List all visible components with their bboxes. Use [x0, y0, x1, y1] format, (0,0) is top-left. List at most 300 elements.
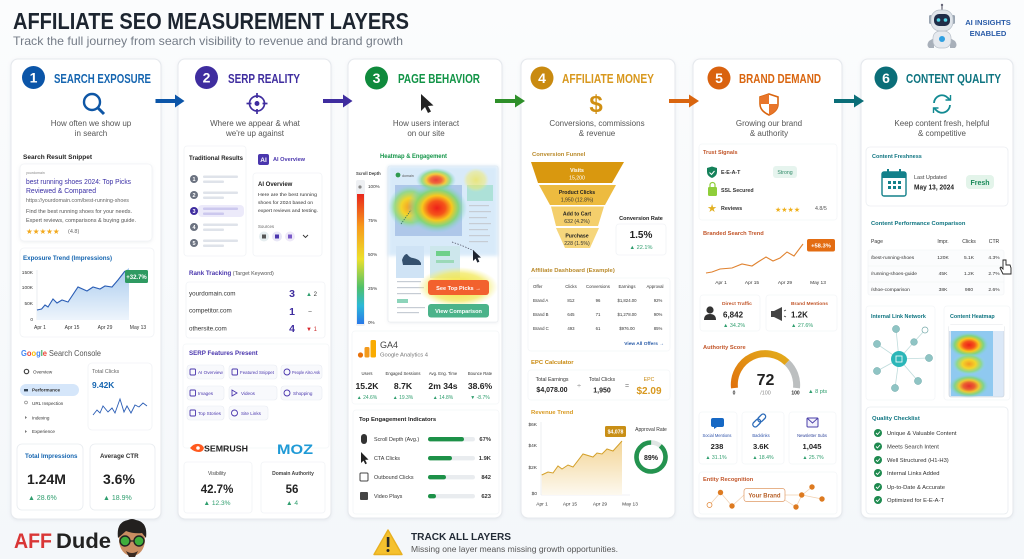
epc calculator: 1,950 — [593, 388, 611, 394]
content performance comparison table: Clicks — [962, 239, 976, 245]
google search console: Overview — [33, 370, 53, 374]
quality checklist: Up-to-Date & Accurate — [887, 485, 945, 491]
line chart: exposure trend: 100K — [22, 285, 34, 291]
ga4 stats: Users — [362, 371, 372, 376]
rank tracking table: ▲ 2 — [306, 292, 318, 298]
content performance comparison table: /shoe-comparison — [871, 287, 910, 293]
stat: visibility: 42.7% — [201, 484, 233, 496]
search result snippet: Expert reviews, comparisons & buying guide. — [26, 218, 136, 224]
content performance comparison table: /best-running-shoes — [871, 255, 915, 261]
top engagement indicators — [353, 410, 499, 514]
google search console — [20, 348, 152, 434]
line chart: branded search trend — [703, 231, 835, 286]
traditional results list: Traditional Results — [189, 156, 244, 162]
button: view comparison: View Comparison — [435, 309, 482, 315]
affiliate dashboard table: Affiliate Dashboard (Example) — [531, 268, 615, 274]
stat: backlinks: ▲ 18.4% — [752, 455, 774, 461]
affiliate dashboard table: 90% — [654, 312, 662, 317]
line chart: branded search trend: Apr 29 — [778, 280, 792, 286]
traditional results list: 5 — [192, 241, 196, 247]
ai overview box: AI Overview — [273, 157, 306, 163]
panel: 6 content quality — [861, 59, 1013, 518]
revenue trend chart — [528, 410, 638, 508]
rank tracking table: 1 — [289, 306, 295, 318]
content performance comparison table: 1.2K — [964, 271, 975, 277]
panel: 4 affiliate money — [521, 59, 675, 518]
stat: newsletter subs: Newsletter Subs — [797, 433, 827, 438]
search result snippet: best running shoes 2024: Top Picks — [26, 179, 131, 186]
affiliate dashboard table: Clicks — [565, 284, 577, 289]
funnel chart: Purchase — [565, 234, 589, 240]
top engagement indicators: Scroll Depth (Avg.) — [374, 437, 419, 443]
stat: domain authority: Domain Authority — [272, 471, 314, 477]
rank tracking table: competitor.com — [189, 308, 232, 314]
revenue trend chart: Apr 29 — [593, 502, 607, 508]
line chart: exposure trend: 0 — [30, 317, 33, 323]
stat: total impressions — [17, 444, 83, 510]
content heatmap — [944, 306, 1010, 400]
heatmap page mockup — [388, 166, 498, 322]
stat: newsletter subs — [789, 412, 836, 464]
funnel chart: 632 (4.2%) — [564, 219, 590, 225]
logo: ga4: Google Analytics 4 — [380, 352, 429, 358]
line chart: branded search trend: May 13 — [810, 280, 826, 286]
rank tracking table: – — [308, 309, 312, 315]
revenue trend chart: $6K — [528, 422, 538, 428]
stat: newsletter subs: 1,045 — [802, 442, 822, 451]
ga4 stats: 38.6% — [468, 381, 493, 391]
affiliate dashboard table: $976.00 — [619, 326, 635, 331]
content freshness — [866, 147, 1008, 206]
quality checklist: Unique & Valuable Content — [887, 431, 957, 437]
badge text: ENABLED — [970, 29, 1007, 38]
revenue trend chart: May 13 — [622, 502, 638, 508]
affiliate dashboard table: $1,278.00 — [617, 312, 637, 317]
stat: total impressions: 1.24M — [27, 471, 66, 487]
heatmap and engagement: Scroll Depth — [356, 171, 381, 176]
badge text — [965, 18, 1011, 38]
search result snippet: Find the best running shoes for your needs. — [26, 209, 132, 215]
line chart: exposure trend: Exposure Trend (Impressions) — [23, 255, 112, 262]
button: view comparison — [428, 304, 489, 318]
affiliate dashboard table: 61 — [596, 326, 601, 331]
stat: brand mentions — [766, 295, 837, 331]
ai overview box: shoes for 2024 based on — [258, 200, 313, 206]
trust signals: Strong — [777, 170, 793, 176]
content performance comparison table: 2.6% — [988, 287, 1000, 293]
stat: social mentions: Social Mentions — [703, 433, 731, 438]
entity recognition: Entity Recognition — [703, 477, 754, 483]
google search console: Total Clicks — [92, 369, 120, 375]
trust signals: ★★★★ — [775, 206, 800, 214]
epc calculator: $2.09 — [636, 386, 662, 397]
affiliate dashboard table: 645 — [567, 312, 575, 317]
heatmap and engagement: Heatmap & Engagement — [380, 154, 447, 160]
description — [51, 119, 132, 138]
donut chart: approval rate — [631, 427, 671, 477]
content performance comparison table: 45K — [939, 271, 948, 277]
serp features present chips: SERP Features Present — [189, 350, 258, 357]
stat: average ctr: ▲ 18.9% — [103, 495, 132, 502]
google search console: Experience — [32, 429, 55, 434]
internal link network diagram: Internal Link Network — [871, 314, 926, 320]
rank tracking table: yourdomain.com — [189, 290, 236, 298]
ai overview box: Here are the best running — [258, 192, 317, 198]
arrow: brand demand to content quality — [834, 94, 864, 108]
trust signals: Reviews — [721, 206, 742, 212]
top engagement indicators: Video Plays — [374, 494, 403, 500]
stat: newsletter subs: ▲ 25.7% — [802, 455, 824, 461]
description: on our site — [407, 129, 445, 138]
rank tracking table: 3 — [289, 288, 295, 300]
stat: total impressions: Total Impressions — [25, 453, 78, 460]
stat: brand mentions: Brand Mentions — [791, 301, 828, 307]
search result snippet: Search Result Snippet — [23, 154, 93, 161]
step number 3: 3 — [373, 70, 381, 86]
funnel chart: Product Clicks — [559, 190, 595, 196]
ga4 stats: ▲ 14.8% — [433, 395, 454, 401]
stat: conversion rate: ▲ 22.1% — [630, 245, 653, 251]
traditional results list: 1 — [192, 177, 196, 183]
line chart: branded search trend: Apr 1 — [715, 280, 727, 286]
serp features present chips: Images — [198, 391, 214, 396]
logo: ga4: GA4 — [380, 340, 398, 350]
affiliate dashboard table: 96 — [596, 298, 601, 303]
stat: average ctr — [90, 444, 155, 510]
affiliate dashboard table: 85% — [654, 326, 662, 331]
step number 6: 6 — [882, 70, 890, 86]
affiliate dashboard table: 493 — [567, 326, 575, 331]
traditional results list: 4 — [192, 225, 196, 231]
stat: domain authority — [261, 462, 325, 513]
line chart: exposure trend: 150K — [22, 270, 34, 276]
description — [210, 119, 301, 138]
content performance comparison table: 980 — [965, 287, 973, 293]
search result snippet: (4.8) — [68, 229, 79, 235]
search result snippet — [20, 154, 152, 241]
icon: target — [246, 93, 268, 114]
affiliate dashboard table: Earnings — [619, 284, 635, 289]
epc calculator: $4,078.00 — [536, 387, 568, 394]
ga4 stats: 15.2K — [356, 381, 379, 391]
epc calculator: Total Earnings — [536, 377, 569, 383]
description — [549, 119, 645, 138]
line chart: exposure trend: May 13 — [130, 325, 146, 331]
badge: AI insights enabled robot — [928, 4, 1011, 48]
line chart: exposure trend: 50K — [24, 301, 34, 307]
top engagement indicators: CTA Clicks — [374, 456, 400, 462]
search result snippet: Reviewed & Compared — [26, 188, 96, 195]
ai overview box — [253, 154, 322, 256]
description: Where we appear & what — [210, 119, 301, 128]
content performance comparison table: Impr. — [937, 239, 949, 245]
icon: dollar sign: $ — [589, 91, 603, 118]
serp features present chips: AI Overview — [198, 370, 223, 375]
stat: average ctr: 3.6% — [103, 471, 135, 487]
quality checklist: Optimized for E-E-A-T — [887, 498, 944, 504]
line chart: branded search trend: Branded Search Trend — [703, 231, 764, 237]
ga4 stats: Bounce Rate — [468, 371, 493, 376]
gauge: authority score: Authority Score — [703, 345, 746, 351]
top engagement indicators: 1.9K — [479, 456, 492, 462]
content performance comparison table: 120K — [937, 255, 949, 261]
ai overview box: Sources — [258, 224, 275, 229]
stat: domain authority: ▲ 4 — [286, 500, 298, 507]
description: Keep content fresh, helpful — [894, 119, 990, 128]
serp features present chips: Videos — [241, 391, 256, 396]
content performance comparison table: 38K — [939, 287, 948, 293]
content freshness: Last Updated — [914, 175, 947, 181]
epc calculator: = — [625, 383, 629, 390]
revenue trend chart: Revenue Trend — [531, 410, 574, 416]
stat: direct traffic: 6,842 — [723, 310, 744, 320]
search result snippet: https://yourdomain.com/best-running-shoes — [26, 198, 130, 204]
step number 1: 1 — [30, 70, 38, 86]
search result snippet: yourdomain — [26, 171, 45, 175]
ga4 stats: Engaged Sessions — [386, 371, 420, 376]
step number 4: 4 — [538, 70, 546, 86]
affiliate dashboard table: 92% — [654, 298, 662, 303]
ga4 stats: ▼ -8.7% — [470, 395, 490, 401]
content performance comparison table: 2.7% — [988, 271, 1000, 277]
heading: content quality: CONTENT QUALITY — [906, 72, 1002, 86]
revenue trend chart: Apr 15 — [563, 502, 577, 508]
heatmap and engagement: 75% — [368, 218, 377, 223]
content freshness: May 13, 2024 — [914, 184, 954, 192]
description: & revenue — [579, 129, 616, 138]
line chart: exposure trend: Apr 1 — [34, 325, 46, 331]
quality checklist: Internal Links Added — [887, 471, 940, 477]
description: & authority — [750, 129, 788, 138]
description: How users interact — [393, 119, 460, 128]
affiliate dashboard table: View All Offers → — [624, 341, 664, 347]
step number 4 — [530, 66, 554, 90]
affiliate dashboard table: Brand B — [533, 312, 549, 317]
serp features present chips: Featured Snippet — [240, 370, 275, 375]
revenue trend chart: Apr 1 — [536, 502, 548, 508]
epc calculator: EPC Calculator — [531, 360, 574, 366]
step number 5: 5 — [715, 70, 723, 86]
serp features present chips — [183, 344, 329, 448]
stat: social mentions: 238 — [711, 442, 723, 451]
stat: brand mentions: 1.2K — [791, 310, 808, 320]
affiliate dashboard table: Offer — [533, 284, 543, 289]
arrow: page behavior to affiliate money — [495, 94, 525, 108]
description: Growing our brand — [736, 119, 802, 128]
funnel chart: 15,200 — [569, 176, 585, 182]
affiliate dashboard table: 812 — [567, 298, 575, 303]
stat: visibility: Visibility — [208, 471, 226, 477]
logo: aff dude — [14, 519, 146, 557]
ga4 stats: ▲ 24.6% — [357, 395, 378, 401]
google search console: Search Console — [49, 349, 102, 358]
badge text: AI INSIGHTS — [965, 18, 1011, 27]
content performance comparison table: CTR — [989, 239, 1000, 245]
gauge: authority score: /100 — [760, 390, 771, 396]
stat: brand mentions: ▲ 27.6% — [791, 323, 813, 329]
line chart: exposure trend: +32.7% — [126, 275, 147, 281]
revenue trend chart: $4K — [528, 443, 538, 449]
line chart: branded search trend: +58.3% — [811, 244, 831, 250]
funnel chart: Conversion Funnel — [532, 152, 586, 158]
ga4 stats: 2m 34s — [428, 381, 458, 391]
heatmap page mockup: domain — [402, 174, 414, 178]
stat: average ctr: Average CTR — [100, 453, 139, 460]
rank tracking table: 4 — [289, 323, 295, 335]
google search console: Performance — [32, 388, 61, 392]
trust signals: SSL Secured — [721, 188, 754, 194]
quality checklist: Meets Search Intent — [887, 444, 939, 450]
content performance comparison table: 4.3% — [988, 255, 1000, 261]
ai overview box: AI — [260, 157, 267, 164]
logo: aff dude: AFF — [14, 530, 52, 553]
icon: cursor — [421, 94, 434, 113]
serp features present chips: People Also Ask — [292, 370, 321, 375]
ga4 stats: Avg. Eng. Time — [429, 371, 458, 376]
quality checklist: Well Structured (H1-H3) — [887, 458, 949, 464]
heading: brand demand: BRAND DEMAND — [739, 72, 821, 86]
revenue trend chart: $2K — [528, 465, 538, 471]
ga4 stats: ▲ 19.3% — [393, 395, 414, 401]
logo: semrush: SEMRUSH — [204, 444, 248, 454]
title: AFFILIATE SEO MEASUREMENT LAYERS — [13, 8, 409, 34]
logo: ga4 — [358, 340, 429, 358]
rank tracking table: ▼ 1 — [306, 327, 318, 333]
step number 6 — [874, 66, 898, 90]
icon: cartoon avatar — [118, 519, 146, 557]
arrow: search exposure to serp reality — [156, 94, 184, 108]
rank tracking table: Rank Tracking (Target Keyword) — [189, 270, 274, 277]
heading: serp reality: SERP REALITY — [228, 72, 301, 86]
entity recognition: Your Brand — [748, 494, 781, 500]
affiliate dashboard table: $1,824.00 — [617, 298, 637, 303]
panel: 5 brand demand — [693, 59, 842, 518]
icon: refresh — [934, 95, 950, 113]
heatmap and engagement: 0% — [368, 320, 375, 325]
affiliate dashboard table — [528, 268, 670, 351]
affiliate dashboard table: Approval — [647, 284, 664, 289]
quality checklist: Quality Checklist — [872, 416, 920, 422]
heading: page behavior: PAGE BEHAVIOR — [398, 72, 480, 86]
ai overview box: AI Overview — [258, 182, 293, 188]
funnel chart — [531, 152, 624, 248]
gauge: authority score: 100 — [791, 390, 800, 396]
funnel chart: Visits — [570, 168, 584, 174]
callout text: Missing one layer means missing growth opportunities. — [411, 545, 618, 554]
description — [393, 119, 460, 138]
description: & competitive — [918, 129, 967, 138]
content performance comparison table: Page — [871, 239, 883, 245]
revenue trend chart: $0 — [532, 491, 537, 497]
description — [894, 119, 990, 138]
logo: moz: MOZ — [277, 441, 314, 457]
panel: 1 search exposure — [11, 59, 161, 519]
stat: backlinks: Backlinks — [752, 433, 770, 438]
trust signals: E-E-A-T — [721, 170, 741, 176]
gauge: authority score — [703, 345, 827, 396]
traditional results list: 2 — [192, 193, 196, 199]
description: we're up against — [225, 129, 285, 138]
stat: conversion rate: 1.5% — [630, 230, 653, 241]
top engagement indicators: Outbound Clicks — [374, 475, 414, 481]
affiliate dashboard table: Brand A — [533, 298, 548, 303]
google search console: Indexing — [32, 416, 50, 420]
trust signals: Trust Signals — [703, 150, 738, 156]
traditional results list: 3 — [192, 209, 196, 215]
stat: conversion rate: Conversion Rate — [619, 216, 663, 222]
description — [736, 119, 802, 138]
subtitle: Track the full journey from search visibility to revenue and brand growth — [13, 34, 403, 48]
traditional results list — [184, 146, 246, 256]
heading: search exposure: SEARCH EXPOSURE — [54, 72, 151, 86]
button: see top picks — [428, 280, 489, 295]
stat: domain authority: 56 — [286, 484, 298, 496]
heatmap and engagement — [356, 154, 498, 326]
step number 1 — [22, 66, 45, 89]
google search console: Google — [21, 348, 47, 358]
google search console: URL Inspection — [32, 401, 64, 406]
button: see top picks: See Top Picks → — [436, 286, 481, 292]
stat: social mentions: ▲ 31.1% — [705, 455, 727, 461]
stat: conversion rate — [616, 216, 666, 255]
gauge: authority score: ▲ 8 pts — [808, 389, 827, 395]
stat: visibility: ▲ 12.3% — [203, 500, 231, 507]
serp features present chips: Site Links — [241, 411, 262, 416]
entity recognition — [699, 472, 837, 514]
line chart: exposure trend: Apr 29 — [98, 325, 113, 331]
affiliate dashboard table: 71 — [596, 312, 601, 317]
ai overview box: expert reviews and testing. — [258, 208, 318, 214]
description: Conversions, commissions — [549, 119, 645, 128]
content heatmap: Content Heatmap — [950, 314, 995, 320]
stat: social mentions — [699, 412, 737, 464]
search result snippet: ★★★★★ — [26, 227, 60, 236]
icon: magnifier — [84, 94, 104, 114]
content freshness: Content Freshness — [872, 154, 922, 160]
affiliate dashboard table: Conversions — [586, 284, 610, 289]
donut chart: approval rate: 89% — [644, 455, 659, 462]
serp features present chips: Top Stories — [198, 411, 222, 416]
content performance comparison table — [868, 221, 1011, 295]
trust signals — [699, 144, 837, 220]
panel: 2 serp reality — [178, 59, 331, 519]
stat: direct traffic: Direct Traffic — [722, 301, 752, 307]
ga4 stats — [352, 331, 499, 404]
heatmap and engagement: 50% — [368, 252, 377, 257]
funnel chart: 1,950 (12.8%) — [561, 198, 594, 204]
content freshness: Fresh — [970, 180, 990, 187]
description: in search — [75, 129, 107, 138]
icon: shield — [760, 94, 778, 115]
stat: total impressions: ▲ 28.6% — [28, 495, 57, 502]
funnel chart: 228 (1.5%) — [564, 241, 590, 247]
description: How often we show up — [51, 119, 132, 128]
heading: affiliate money: AFFILIATE MONEY — [562, 72, 655, 86]
serp features present chips: Shopping — [293, 391, 313, 396]
icon: robot — [928, 4, 956, 48]
revenue trend chart: $4,078 — [608, 430, 624, 436]
google search console: 9.42K — [92, 380, 114, 390]
rank tracking table — [186, 270, 325, 338]
quality checklist — [866, 407, 1008, 514]
icon: warning triangle — [374, 530, 402, 554]
trust signals: 4.8/5 — [815, 206, 827, 212]
callout: track all layers — [374, 530, 618, 554]
line chart: exposure trend — [20, 248, 154, 337]
affiliate dashboard table: Brand C — [533, 326, 549, 331]
panel: 3 page behavior — [348, 59, 502, 518]
top engagement indicators: 67% — [479, 437, 491, 443]
